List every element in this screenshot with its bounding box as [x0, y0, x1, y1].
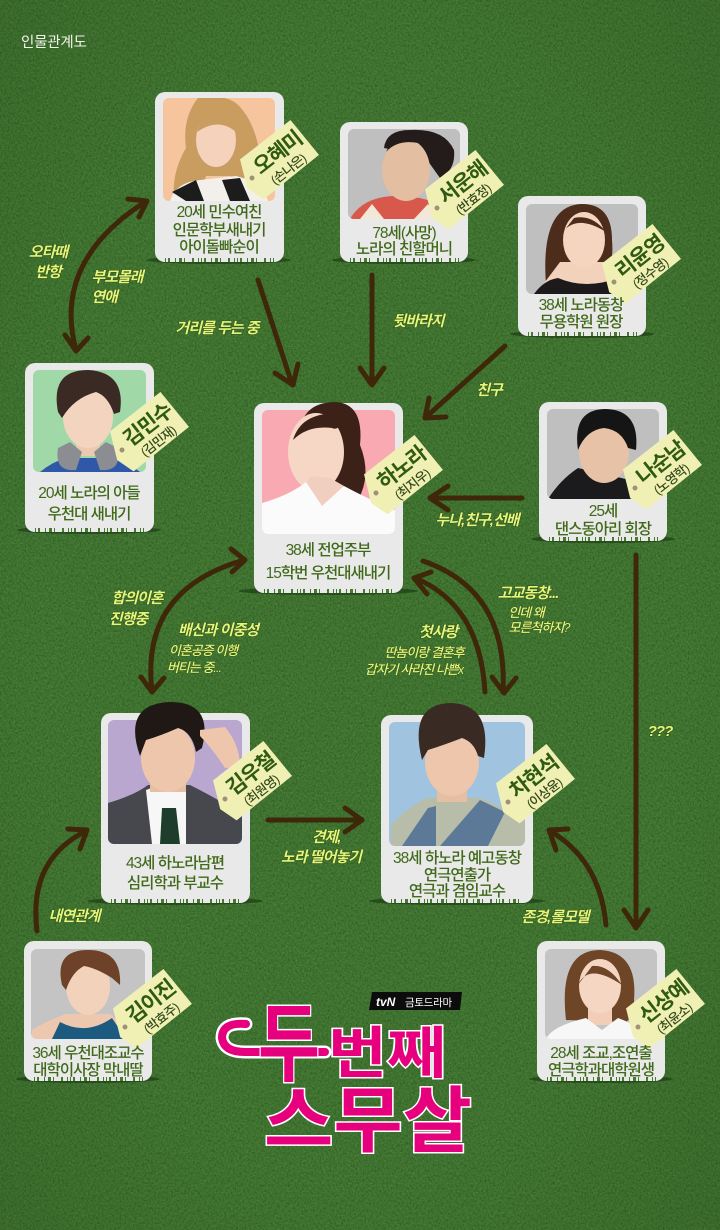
panel: 김이진 [16, 941, 193, 1083]
caption: 김우철: 심리학과 부교수 [127, 874, 224, 892]
tag: 나순남 [614, 429, 703, 513]
panel: 리윤영 [510, 196, 682, 338]
photo: 나순남 [547, 409, 659, 499]
caption: 리윤영 [539, 296, 624, 331]
tag: 신상예: 신상예 [635, 976, 693, 1028]
arrow: 김이진 to 김우철 [36, 829, 87, 931]
label: 합의이혼 진행중 [109, 590, 166, 628]
logo swirl [222, 1024, 325, 1052]
label: 인데 왜 모른척하지 [508, 605, 571, 635]
caption: 차현석: 연극과 겸임교수 [409, 882, 506, 900]
tag: 김이진: 김이진 [122, 976, 180, 1028]
arrow: 오혜미 to 하노라 [258, 280, 298, 385]
panel: 오혜미 [147, 92, 320, 264]
tag: 오혜미 [231, 119, 320, 203]
title: 인물관계도 [21, 34, 87, 51]
caption: 나순남 [555, 502, 652, 538]
caption: 서운해: 78세(사망) [372, 224, 437, 242]
tvN badge: tvN [376, 995, 396, 1009]
label: 고교동창: 고교동창... [498, 585, 558, 602]
photo: 김이진 [31, 949, 145, 1039]
caption: 신상예: 28세 조교,조연출 [550, 1044, 652, 1062]
caption: 리윤영: 38세 노라동창 [539, 296, 624, 314]
tag: 오혜미: 오혜미 [249, 127, 307, 179]
label: 견제, 노라 떨어놓기: 견제, [312, 829, 340, 846]
tag: 신상예 [617, 968, 706, 1052]
tag: 김이진: (박효주) [141, 1000, 182, 1037]
label: 이혼공증 이행 버티는 중: 이혼공증 이행 [169, 643, 240, 658]
caption: 나순남: 댄스동아리 회장 [555, 520, 652, 538]
caption: 서운해: 노라의 친할머니 [356, 240, 452, 258]
tag: 김이진 [104, 968, 193, 1052]
caption: 김우철: 43세 하노라남편 [126, 854, 224, 872]
label: 첫사랑: 첫사랑 [419, 624, 460, 641]
label: 이혼공증 이행 버티는 중 [167, 643, 240, 675]
tag: 김우철: (최원영) [241, 772, 282, 809]
panel: 나순남 [531, 402, 703, 543]
caption: 오혜미: 20세 민수여친 [177, 203, 261, 221]
tag: 김우철: 김우철 [222, 748, 280, 800]
label: 오타때 반항 [29, 244, 70, 281]
caption: 리윤영: 무용학원 원장 [540, 313, 623, 331]
panel: 서운해 [332, 122, 505, 264]
photo: 차현석 [389, 703, 525, 846]
tag: 서운해 [416, 149, 505, 233]
label: 부모몰래 연애 [91, 269, 146, 306]
caption: 김이진: 대학이사장 막내딸 [33, 1061, 143, 1079]
photo: 김민수 [33, 370, 146, 472]
tag: 김민수 [101, 391, 190, 475]
panel: 차현석 [369, 703, 576, 905]
tag: 리윤영: (정수영) [630, 255, 671, 292]
logo line one: 번째 [328, 1009, 446, 1090]
tag: 오혜미: (손나은) [268, 151, 309, 188]
label: 견제, 노라 떨어놓기: 노라 떨어놓기 [281, 849, 364, 866]
caption: 하노라 [266, 541, 390, 582]
label: 거리를 두는 중: 거리를 두는 중 [175, 320, 262, 337]
caption: 신상예 [548, 1044, 654, 1079]
tag: 하노라 [355, 434, 444, 518]
tag: 나순남: 나순남 [632, 437, 690, 489]
caption: 김이진 [32, 1044, 144, 1079]
arrows [36, 199, 648, 931]
photo: 오혜미 [163, 98, 275, 201]
caption: 차현석: 연극연출가 [424, 866, 491, 884]
caption: 김민수: 우천대 새내기 [48, 505, 130, 523]
arrow: 하노라 and 김우철 two-way [141, 549, 245, 692]
arrow: 신상예 to 차현석 [549, 829, 606, 925]
label: 딴놈이랑 결혼후 갑자기 사라진 나쁜x: 딴놈이랑 결혼후 [384, 645, 467, 660]
photo: 리윤영 [526, 204, 638, 294]
tag: 김우철 [204, 740, 293, 824]
photo: 김우철 [108, 702, 242, 844]
caption: 차현석: 38세 하노라 예고동창 [393, 849, 522, 867]
tag: 서운해: 서운해 [434, 157, 492, 209]
label: 존경,롤모델: 존경,롤모델 [521, 909, 592, 926]
logo line two: 스무살 [264, 1062, 472, 1167]
label: 부모몰래 연애: 연애 [91, 289, 120, 306]
panel: 김우철 [87, 702, 293, 905]
label: 배신과 이중성: 배신과 이중성 [178, 622, 261, 639]
tag: 차현석: (이상윤) [524, 775, 565, 812]
label: 오타때 반항: 반항 [35, 264, 64, 281]
caption: 나순남: 25세 [589, 502, 617, 520]
arrow: 나순남 to 하노라 [430, 486, 522, 510]
label: 인데 왜 모른척하지: 모른척하지? [508, 620, 571, 635]
relation labels [29, 244, 673, 926]
label: 딴놈이랑 결혼후 갑자기 사라진 나쁜x [365, 645, 467, 677]
label: 합의이혼 진행중: 진행중 [109, 611, 150, 628]
tvN badge: 금토드라마 [405, 997, 452, 1009]
caption: 김우철 [126, 854, 224, 892]
arrow: 오혜미 and 김민수 two-way [65, 199, 147, 351]
photo: 서운해 [348, 129, 460, 219]
logo line one: 두 [258, 974, 320, 1099]
caption: 하노라: 38세 전업주부 [286, 541, 371, 559]
panel: 신상예 [529, 941, 706, 1083]
label: 오타때 반항: 오타때 [29, 244, 70, 261]
tvN badge [369, 992, 462, 1010]
arrow: 나순남 to 신상예 [624, 555, 648, 928]
arrow: 서운해 to 하노라 [360, 275, 384, 385]
label: 부모몰래 연애: 부모몰래 [91, 269, 146, 286]
arrow: 차현석 to 하노라 [414, 572, 485, 692]
arrow: 리윤영 to 하노라 [425, 346, 505, 418]
logo line one [258, 974, 446, 1099]
caption: 오혜미: 인문학부새내기 [173, 221, 265, 239]
tag: 리윤영: 리윤영 [611, 231, 669, 283]
caption: 김이진: 36세 우천대조교수 [32, 1044, 144, 1062]
tag: 서운해: (반효정) [453, 181, 494, 218]
label: 누나,친구,선배: 누나,친구,선배 [435, 512, 522, 529]
label: 인데 왜 모른척하지: 인데 왜 [508, 605, 547, 620]
label: question marks: ??? [648, 723, 673, 740]
tag: 리윤영 [593, 223, 682, 307]
caption: 김민수: 20세 노라의 아들 [38, 484, 140, 502]
tag: 하노라: (최지우) [392, 466, 433, 503]
tag: 차현석: 차현석 [505, 751, 563, 803]
tag: 하노라: 하노라 [373, 442, 431, 494]
arrow: 하노라 to 차현석 [423, 561, 516, 693]
panel: 김민수 [17, 363, 190, 534]
label: 내연관계: 내연관계 [48, 908, 103, 925]
tag: 신상예: (최윤소) [654, 1000, 695, 1037]
label: 이혼공증 이행 버티는 중: 버티는 중... [167, 660, 222, 675]
caption: 오혜미: 아이돌빠순이 [179, 238, 259, 256]
label: 합의이혼 진행중: 합의이혼 [111, 590, 166, 607]
label: 견제, 노라 떨어놓기 [281, 829, 364, 866]
label: 뒷바라지: 뒷바라지 [392, 313, 447, 330]
photo: 신상예 [545, 949, 657, 1039]
photo: 하노라 [262, 402, 395, 534]
label: 딴놈이랑 결혼후 갑자기 사라진 나쁜x: 갑자기 사라진 나쁜x [365, 662, 465, 677]
tag: 나순남: (노영학) [651, 461, 692, 498]
caption: 김민수 [38, 484, 140, 523]
caption: 오혜미 [173, 203, 265, 256]
logo: 두번째 스무살 [222, 974, 472, 1167]
caption: 하노라: 15학번 우천대새내기 [266, 564, 390, 582]
panel: 하노라 [238, 402, 444, 595]
tag: 김민수: 김민수 [119, 399, 177, 451]
label: 친구: 친구 [476, 382, 504, 399]
tag: 차현석 [487, 743, 576, 827]
tag: 김민수: (김민재) [138, 423, 179, 460]
caption: 신상예: 연극학과대학원생 [548, 1061, 654, 1079]
caption: 차현석 [393, 849, 522, 900]
caption: 서운해 [356, 224, 452, 258]
arrow: 김우철 to 차현석 [268, 808, 362, 832]
